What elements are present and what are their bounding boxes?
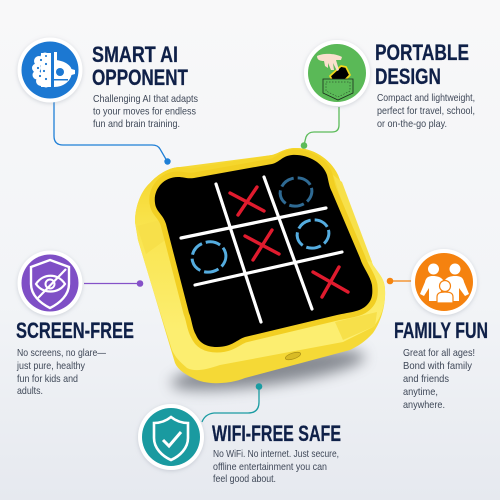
description: perfect for travel, school, <box>377 105 475 117</box>
description: fun and brain training. <box>93 118 180 130</box>
description: anywhere. <box>403 399 445 411</box>
description: No screens, no glare— <box>17 347 106 359</box>
icon: brain and robot <box>18 38 82 102</box>
connector: wifi <box>202 383 262 422</box>
description: Challenging AI that adapts <box>93 93 198 105</box>
heading: SMART AI <box>92 42 178 67</box>
description: anytime, <box>403 386 438 398</box>
icon: shield with crossed eye <box>18 250 82 316</box>
panel: wifi-free safe <box>138 404 341 485</box>
icon: family <box>411 249 477 315</box>
side button <box>284 351 302 361</box>
panel: family fun <box>394 249 488 411</box>
board grid <box>181 177 342 322</box>
heading: DESIGN <box>375 64 441 89</box>
description: fun for kids and <box>17 373 78 385</box>
icon: hand and pocket <box>304 40 370 106</box>
description: offline entertainment you can <box>213 461 327 473</box>
panel: screen-free <box>16 250 134 397</box>
heading: WIFI-FREE SAFE <box>212 421 341 446</box>
heading: OPPONENT <box>92 65 188 90</box>
description: or on-the-go play. <box>377 118 447 130</box>
description: and friends <box>403 373 449 385</box>
device shadow <box>169 342 367 398</box>
description: feel good about. <box>213 473 276 485</box>
device lower body <box>135 148 385 383</box>
connector: portable <box>301 107 339 149</box>
description: No WiFi. No internet. Just secure, <box>213 448 339 460</box>
connector: screen-free <box>84 280 143 287</box>
heading: SCREEN-FREE <box>16 318 134 343</box>
description: Great for all ages! <box>403 347 475 359</box>
connector: smart AI <box>54 102 171 165</box>
red X marks <box>230 187 348 297</box>
description: adults. <box>17 385 43 397</box>
description: Bond with family <box>403 360 473 372</box>
device screen with rim <box>155 155 372 347</box>
game device <box>135 148 385 383</box>
corner facets <box>137 175 377 340</box>
description: Compact and lightweight, <box>377 92 475 104</box>
heading: PORTABLE <box>375 40 469 65</box>
blue O marks <box>189 174 332 276</box>
description: to your moves for endless <box>93 106 196 118</box>
connector: family <box>387 278 412 284</box>
device top surface <box>135 148 385 370</box>
panel: smart AI opponent <box>18 38 198 130</box>
icon: shield check <box>138 404 204 470</box>
description: just pure, healthy <box>16 360 86 372</box>
panel: portable design <box>304 40 475 130</box>
